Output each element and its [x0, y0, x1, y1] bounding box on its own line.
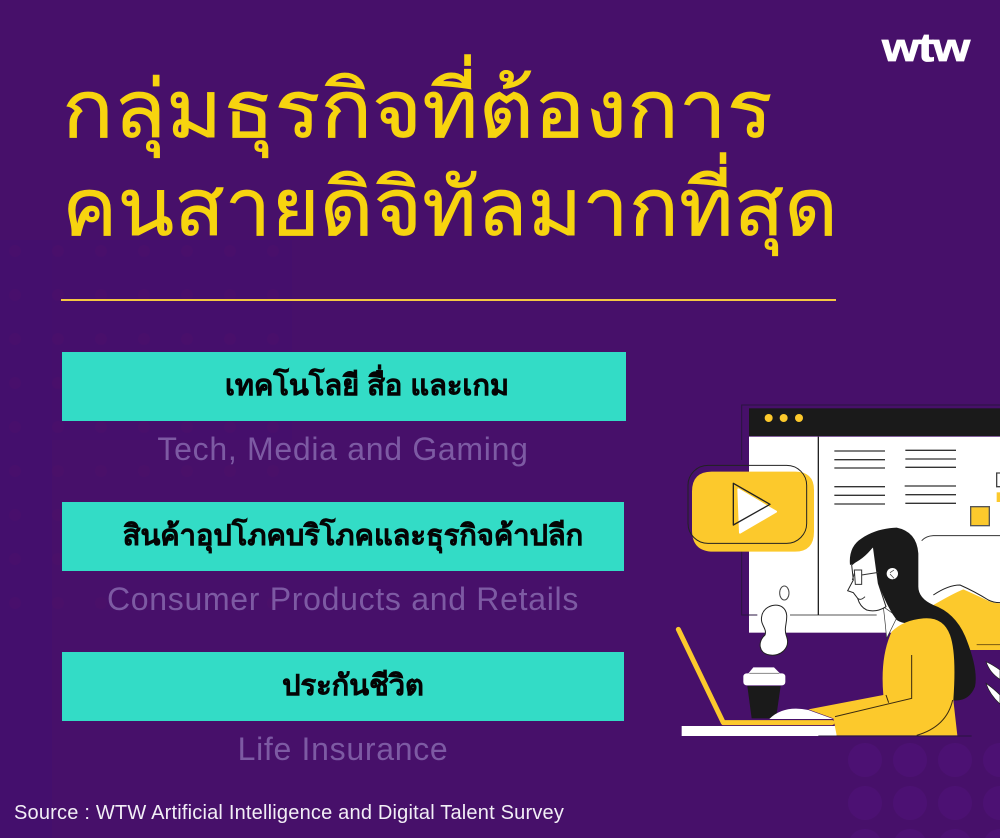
bar: life insurance thai label: ประกันชีวิต — [282, 670, 424, 702]
title: คนสายดิจิทัลมากที่สุด — [62, 163, 838, 252]
bar: consumer thai label: สินค้าอุปโภคบริโภคและธุรกิจค้าปลีก — [123, 520, 583, 552]
icon: coffee cup — [743, 667, 785, 718]
panel: consumer products and retails — [62, 502, 624, 617]
icon: video play button — [688, 465, 814, 552]
figure: woman — [808, 528, 976, 735]
source note: Source : WTW Artificial Intelligence and Digital Talent Survey — [14, 802, 564, 824]
title underline — [61, 299, 836, 301]
bar: consumer thai label — [62, 502, 624, 571]
english label: consumer: Consumer Products and Retails — [107, 581, 579, 617]
title — [62, 54, 838, 256]
bar: tech thai label — [62, 352, 626, 421]
title: กลุ่มธุรกิจที่ต้องการ — [62, 65, 773, 154]
illustration: woman working at laptop — [676, 404, 1000, 736]
browser window — [742, 405, 1000, 650]
icon: plant leaves — [986, 662, 1000, 704]
bar: life insurance thai label — [62, 652, 624, 721]
english label: life insurance: Life Insurance — [238, 731, 448, 767]
english label: tech: Tech, Media and Gaming — [157, 431, 529, 467]
panel: tech, media and gaming — [62, 352, 626, 467]
icon: steam — [760, 586, 789, 655]
panel: life insurance — [62, 652, 624, 767]
icon: laptop and desk — [678, 629, 972, 736]
bar: tech thai label: เทคโนโลยี สื่อ และเกม — [225, 370, 509, 402]
logo: wtw: wtw — [882, 26, 969, 70]
